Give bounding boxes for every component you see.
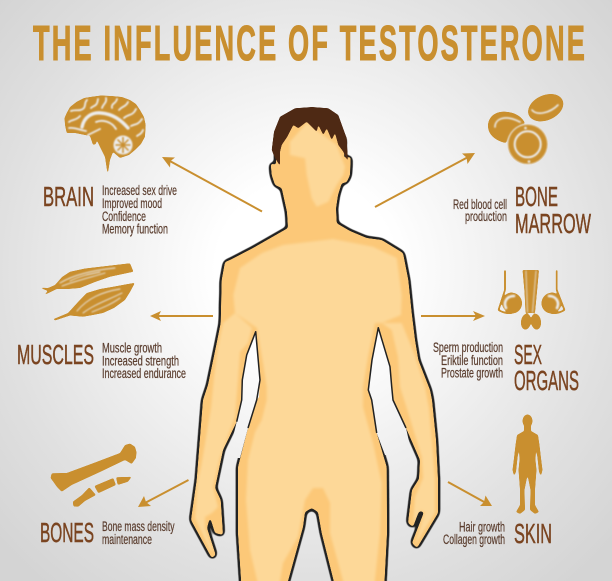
arrow: to bones [138,480,188,507]
text: brain effects: Confidence [102,209,146,224]
text: sex organs effects: Prostate growth [441,366,503,380]
panel: bone marrow [453,89,591,239]
label: muscles: MUSCLES [17,339,94,370]
icon: muscles [39,263,135,320]
text: sex organs effects: Sperm production [433,340,503,355]
label: sex organs: SEX [514,339,542,370]
left arm highlight [195,313,252,551]
text: muscles effects: Muscle growth [102,340,162,356]
panel: muscles [17,263,186,381]
arrow: to brain [162,157,262,212]
arrow: to muscles [150,311,213,321]
text: bone marrow effects: Red blood cell [453,197,507,212]
right gap between arm and torso [368,328,412,455]
text: brain effects: Improved mood [102,196,162,211]
icon: red blood cells [488,89,568,165]
label: bones: BONES [40,517,94,548]
hair [272,107,348,166]
right arm highlight [382,323,435,545]
text: bone marrow effects: production [465,209,507,224]
text: skin effects: Collagen growth [443,532,505,547]
torso highlight [233,239,402,581]
panel: skin [443,414,552,549]
panel: brain [43,96,177,236]
text: brain effects: Increased sex drive [102,183,177,198]
icon: sex organs [498,270,564,330]
left gap between arm and torso [228,332,260,458]
text: muscles effects [102,340,186,381]
label: sex organs [514,339,579,396]
text: bones effects [102,519,175,547]
text: brain effects: Memory function [102,222,168,236]
label: bone marrow [515,181,591,239]
label: brain: BRAIN [43,181,94,212]
body with shading [191,112,438,581]
text: muscles effects: Increased strength [102,354,179,368]
arrow: to sex organs [421,311,485,321]
face highlight [290,123,345,207]
label: bone marrow: BONE [515,181,558,212]
text: bones effects: maintenance [102,532,152,547]
text: skin effects: Hair growth [459,520,505,534]
text: sex organs effects [433,340,503,380]
text: bone marrow effects [453,197,507,224]
panel: sex organs [433,270,579,396]
icon: bones [50,444,136,507]
text: skin effects [443,520,505,547]
text: bones effects: Bone mass density [102,519,175,534]
arrow: to skin [448,482,492,506]
label: skin: SKIN [514,518,552,549]
central human figure [191,107,438,581]
arrow: to bone marrow [375,153,475,207]
icon: brain [64,96,146,175]
icon: human silhouette [512,414,542,514]
panel: bones [40,444,175,548]
text: brain effects [102,183,177,236]
text: sex organs effects: Eriktile function [441,353,503,368]
text: muscles effects: Increased endurance [102,366,186,381]
